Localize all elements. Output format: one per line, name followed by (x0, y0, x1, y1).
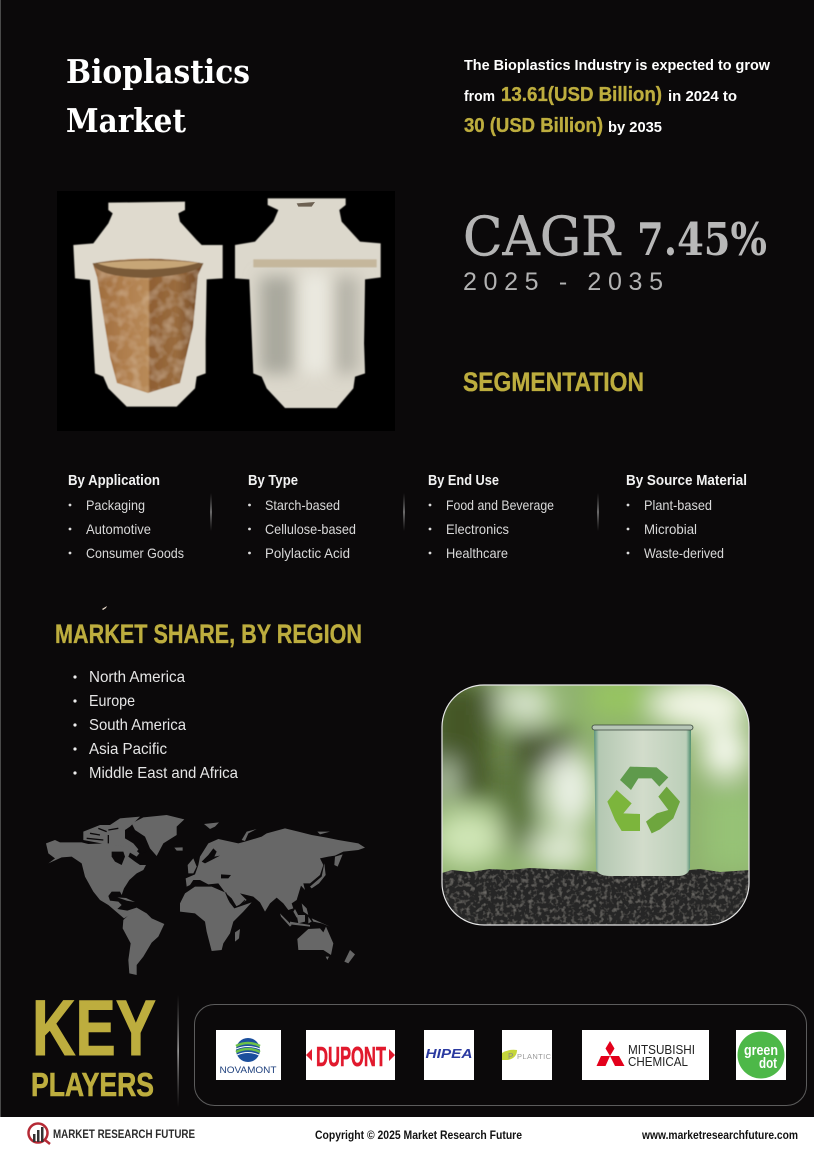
icon: market research future logo (28, 1124, 50, 1144)
soil (442, 868, 750, 925)
region list: Middle East and Africa (89, 765, 238, 782)
market growth statement: from (464, 88, 495, 105)
logo: Novamont (216, 1030, 281, 1080)
segment: by end use: Healthcare (446, 545, 508, 561)
title (66, 52, 250, 140)
logo: Plantic: P (508, 1052, 513, 1061)
segment: by application: Packaging (86, 497, 145, 513)
footer: Copyright © 2025 Market Research Future (315, 1128, 522, 1142)
logo: Plantic: PLANTIC (517, 1052, 552, 1061)
segment: by source material: Microbial (644, 521, 697, 537)
title: Bioplastics (66, 52, 250, 91)
region list: Asia Pacific (89, 741, 167, 758)
logo: DuPont: DUPONT (316, 1041, 386, 1072)
segment: by end use: Electronics (446, 521, 509, 537)
segment: by type (248, 472, 356, 561)
segment: by application: By Application (68, 472, 160, 489)
region list (73, 669, 238, 782)
market growth statement: by 2035 (608, 119, 662, 136)
logo: Hipea: HIPEA (426, 1046, 472, 1061)
segment: by end use (428, 472, 554, 561)
logo: Mitsubishi Chemical: MITSUBISHI (628, 1043, 695, 1057)
region list: South America (89, 717, 186, 734)
segment: by application: Automotive (86, 521, 151, 537)
market share heading: MARKET SHARE, BY REGION (55, 619, 362, 649)
segment: by source material: By Source Material (626, 472, 747, 489)
segment: by type: Polylactic Acid (265, 545, 350, 561)
segment: by type: Cellulose-based (265, 521, 356, 537)
segment: by end use: By End Use (428, 472, 499, 489)
key players heading (31, 983, 156, 1103)
title: Market (66, 101, 187, 140)
segment: by source material: Plant-based (644, 497, 712, 513)
segment: by end use: Food and Beverage (446, 497, 554, 513)
CAGR figure: 2025 - 2035 (463, 268, 663, 296)
footer: MARKET RESEARCH FUTURE (53, 1127, 195, 1141)
world map (46, 815, 365, 975)
logo: Plantic (502, 1030, 552, 1080)
logo: Mitsubishi Chemical (582, 1030, 709, 1080)
CAGR figure: CAGR (463, 205, 621, 268)
segment: by source material: Waste-derived (644, 545, 724, 561)
logo: Green Dot: green (744, 1042, 778, 1059)
segment: by type: Starch-based (265, 497, 340, 513)
photo: recycling jar on soil (425, 680, 760, 925)
photo: bioplastic cup and molds (57, 191, 395, 431)
logo: DuPont (306, 1030, 395, 1080)
segmentation heading: SEGMENTATION (463, 367, 644, 397)
logo: Novamont: NOVAMONT (220, 1065, 277, 1075)
key players heading: PLAYERS (31, 1066, 154, 1103)
logo: Hipea (424, 1030, 474, 1080)
logo: Green Dot: dot (759, 1055, 777, 1072)
region list: North America (89, 669, 185, 686)
market growth statement: 30 (USD Billion) (464, 115, 603, 137)
segment: by application (68, 472, 184, 561)
segment: by application: Consumer Goods (86, 545, 184, 561)
footer (0, 1117, 814, 1150)
region list: Europe (89, 693, 135, 710)
jar (594, 730, 691, 876)
key players panel (194, 1004, 806, 1106)
segment: by source material (626, 472, 747, 561)
logo: Mitsubishi Chemical: CHEMICAL (628, 1055, 688, 1069)
market growth statement (464, 57, 770, 137)
CAGR figure: 7.45% (637, 213, 767, 266)
segment: by type: By Type (248, 472, 298, 489)
logo: Green Dot (736, 1030, 786, 1080)
market growth statement: 13.61(USD Billion) (501, 84, 662, 106)
market growth statement: The Bioplastics Industry is expected to grow (464, 57, 770, 74)
market growth statement: in 2024 to (668, 88, 737, 105)
key players heading: KEY (32, 983, 156, 1072)
CAGR figure (463, 205, 767, 296)
